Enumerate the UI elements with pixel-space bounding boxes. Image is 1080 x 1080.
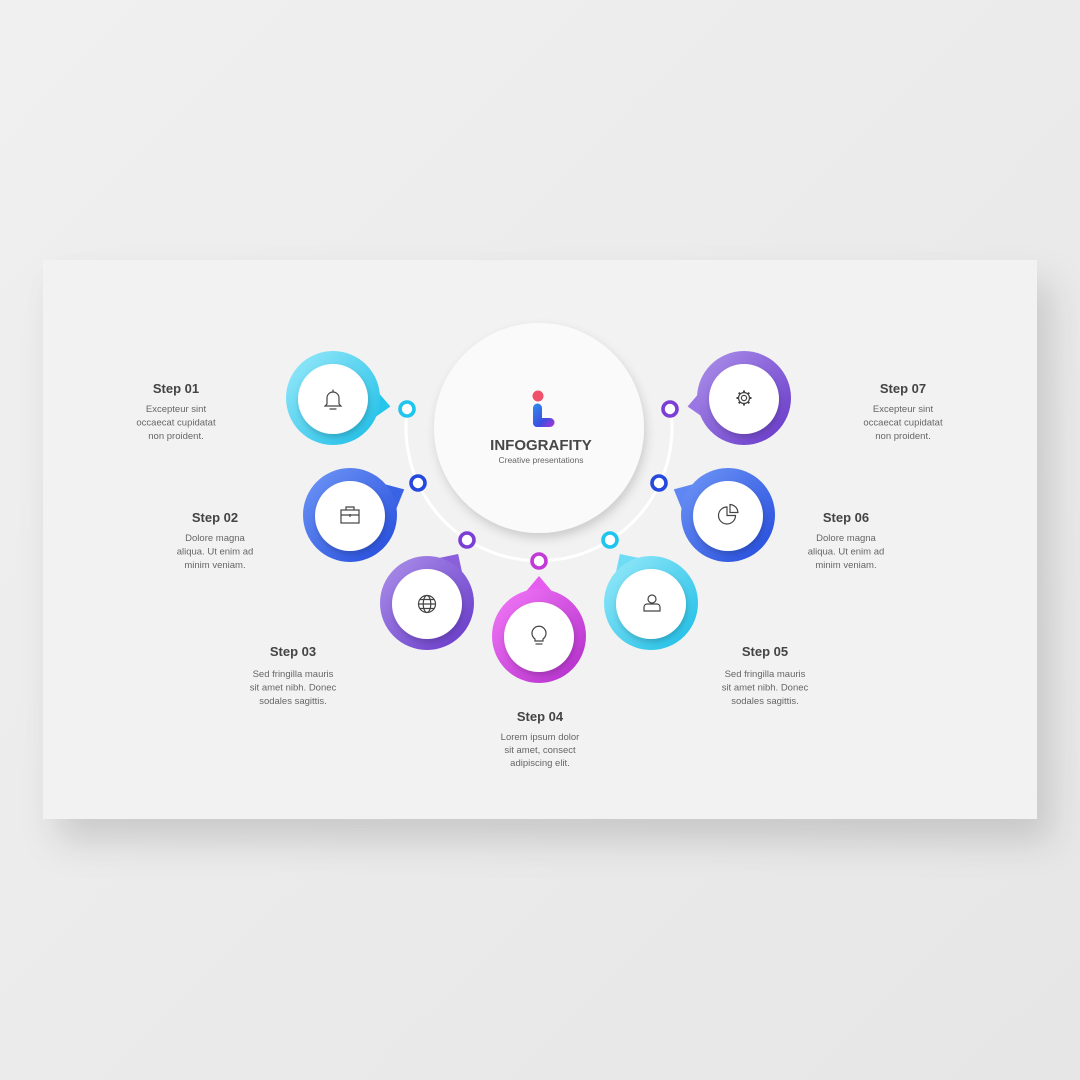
title: INFOGRAFITY <box>490 437 592 454</box>
icon: pie chart <box>718 504 738 524</box>
icon: bulb <box>532 626 546 644</box>
arc connector <box>406 407 672 561</box>
text: step 07: occaecat cupidatat <box>863 418 943 428</box>
text: step 01 <box>136 381 216 442</box>
text: step 02: aliqua. Ut enim ad <box>177 546 253 558</box>
step 05 bubble <box>604 554 698 650</box>
text: step 03: sit amet nibh. Donec <box>250 682 337 694</box>
text: step 07: Excepteur sint <box>873 404 933 415</box>
text: step 04: adipiscing elit. <box>510 758 570 769</box>
text: step 05 <box>722 644 809 707</box>
text: step 05: sodales sagittis. <box>731 696 799 707</box>
text: step 02: minim veniam. <box>184 560 246 571</box>
text: step 01: non proident. <box>148 431 204 442</box>
text: step 06: minim veniam. <box>815 560 877 571</box>
text: step 04: sit amet, consect <box>504 745 576 756</box>
text: step 05: Step 05 <box>742 644 788 659</box>
text: step 04: Lorem ipsum dolor <box>501 732 579 743</box>
text: step 07: non proident. <box>875 431 931 442</box>
text: step 03 <box>250 644 337 707</box>
step 04 bubble <box>492 576 586 683</box>
step 07 bubble <box>688 351 791 445</box>
text: step 06 <box>808 510 884 571</box>
text: step 02 <box>177 510 253 571</box>
text: step 06: Step 06 <box>823 510 869 525</box>
step 03 bubble <box>380 554 474 650</box>
text: step 04: Step 04 <box>517 709 564 724</box>
text: step 02: Dolore magna <box>185 533 246 544</box>
text: step 06: aliqua. Ut enim ad <box>808 546 884 558</box>
text: step 03: Step 03 <box>270 644 316 659</box>
step 02 bubble <box>303 468 404 562</box>
logo <box>532 390 554 427</box>
icon: briefcase <box>341 507 359 523</box>
text: step 02: Step 02 <box>192 510 238 525</box>
subtitle: Creative presentations <box>498 455 584 465</box>
card <box>43 260 1037 819</box>
text: step 07: Step 07 <box>880 381 926 396</box>
text: step 01: occaecat cupidatat <box>136 418 216 428</box>
text: step 05: sit amet nibh. Donec <box>722 682 809 694</box>
text: step 07 <box>863 381 943 442</box>
text: step 03: Sed fringilla mauris <box>253 669 334 680</box>
text: step 01: Step 01 <box>153 381 199 396</box>
text: step 06: Dolore magna <box>816 533 877 544</box>
center circle <box>434 323 644 533</box>
icon: bell <box>325 390 341 409</box>
icon: person <box>644 595 660 611</box>
step 06 bubble <box>674 468 775 562</box>
icon: gear <box>736 390 752 406</box>
text: step 01: Excepteur sint <box>146 404 206 415</box>
step 01 bubble <box>286 351 390 445</box>
text: step 05: Sed fringilla mauris <box>725 669 806 680</box>
text: step 03: sodales sagittis. <box>259 696 327 707</box>
text: step 04 <box>501 709 579 769</box>
dots <box>400 402 677 568</box>
icon: globe <box>418 596 436 612</box>
